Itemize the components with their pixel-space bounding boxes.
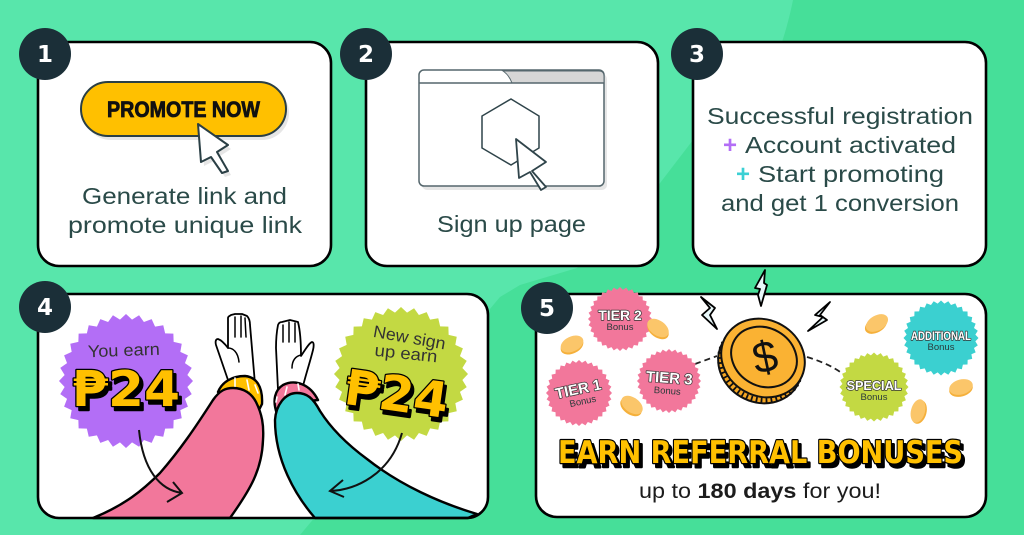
badge: new sign up earn bbox=[334, 307, 468, 441]
panel 3: conversion bbox=[693, 42, 986, 266]
lightning bolts bbox=[701, 270, 830, 331]
panel 2: sign up bbox=[366, 42, 658, 266]
panel 5: referral bonuses bbox=[536, 270, 986, 517]
badge: additional bbox=[904, 300, 978, 376]
arrow: to teal arm bbox=[330, 433, 402, 497]
caption: Generate link and bbox=[82, 183, 287, 209]
badge: special bbox=[840, 352, 908, 422]
badge: tier 2 bbox=[588, 287, 652, 351]
badge: tier 2: TIER 2 bbox=[598, 307, 642, 323]
badge: you earn: ₱24 bbox=[75, 365, 183, 422]
panel 1: promote bbox=[38, 42, 331, 266]
badge: new sign up earn: New sign bbox=[372, 322, 447, 353]
conversion text: + bbox=[736, 161, 750, 188]
step badge 4: 4 bbox=[37, 295, 53, 321]
badge: you earn: You earn bbox=[87, 340, 160, 361]
caption: Sign up page bbox=[437, 211, 586, 237]
badge: new sign up earn: ₱24 bbox=[341, 359, 452, 430]
badge: you earn bbox=[59, 314, 193, 448]
conversion text: and get 1 conversion bbox=[721, 190, 959, 216]
icon: browser window bbox=[419, 70, 607, 190]
caption: promote unique link bbox=[68, 212, 303, 238]
conversion text bbox=[707, 103, 973, 216]
icon: cursor bbox=[198, 124, 231, 177]
step badge 1 bbox=[19, 28, 71, 80]
badge: tier 3: Bonus bbox=[653, 385, 681, 398]
heading: EARN REFERRAL BONUSES bbox=[561, 439, 966, 475]
badge: special: Bonus bbox=[861, 392, 888, 403]
badge: tier 1: TIER 1 bbox=[554, 376, 603, 403]
subheading: up to 180 days for you! bbox=[639, 480, 881, 503]
badge: additional: ADDITIONAL bbox=[911, 331, 971, 343]
badge: new sign up earn: ₱24 bbox=[344, 363, 455, 434]
badge: tier 3 bbox=[637, 349, 701, 413]
step badge 3 bbox=[671, 28, 723, 80]
badge: tier 1 bbox=[546, 360, 612, 426]
badge: tier 1: Bonus bbox=[569, 394, 597, 410]
badge: special: SPECIAL bbox=[846, 378, 902, 393]
badge: tier 2: Bonus bbox=[607, 322, 634, 333]
caption bbox=[68, 183, 303, 238]
heading: EARN REFERRAL BONUSES bbox=[558, 435, 963, 471]
step badge 5 bbox=[521, 282, 573, 334]
coin bbox=[704, 304, 819, 418]
step badge 2 bbox=[340, 28, 392, 80]
badge: new sign up earn: up earn bbox=[374, 341, 438, 366]
step badge 2: 2 bbox=[358, 42, 374, 68]
badge: additional: Bonus bbox=[928, 342, 955, 353]
conversion text: + bbox=[723, 132, 737, 159]
badge: you earn: ₱24 bbox=[72, 361, 180, 418]
step badge 4 bbox=[19, 281, 71, 333]
coin: $ bbox=[748, 331, 782, 384]
panel 4: high five bbox=[38, 294, 488, 518]
promote now button bbox=[81, 82, 289, 140]
step badge 1: 1 bbox=[37, 42, 53, 68]
promote now button: PROMOTE NOW bbox=[107, 97, 260, 122]
conversion text: Start promoting bbox=[758, 161, 944, 187]
arrow: to pink arm bbox=[139, 430, 182, 502]
coin: near tier 2 bbox=[644, 315, 672, 343]
conversion text: Account activated bbox=[745, 132, 956, 158]
floating coins bbox=[558, 311, 975, 426]
illustration: arms bbox=[93, 314, 477, 518]
step badge 5: 5 bbox=[539, 296, 555, 322]
dashed connector lines bbox=[695, 356, 843, 374]
badge: tier 3: TIER 3 bbox=[645, 368, 693, 389]
conversion text: Successful registration bbox=[707, 103, 973, 129]
step badge 3: 3 bbox=[689, 42, 705, 68]
